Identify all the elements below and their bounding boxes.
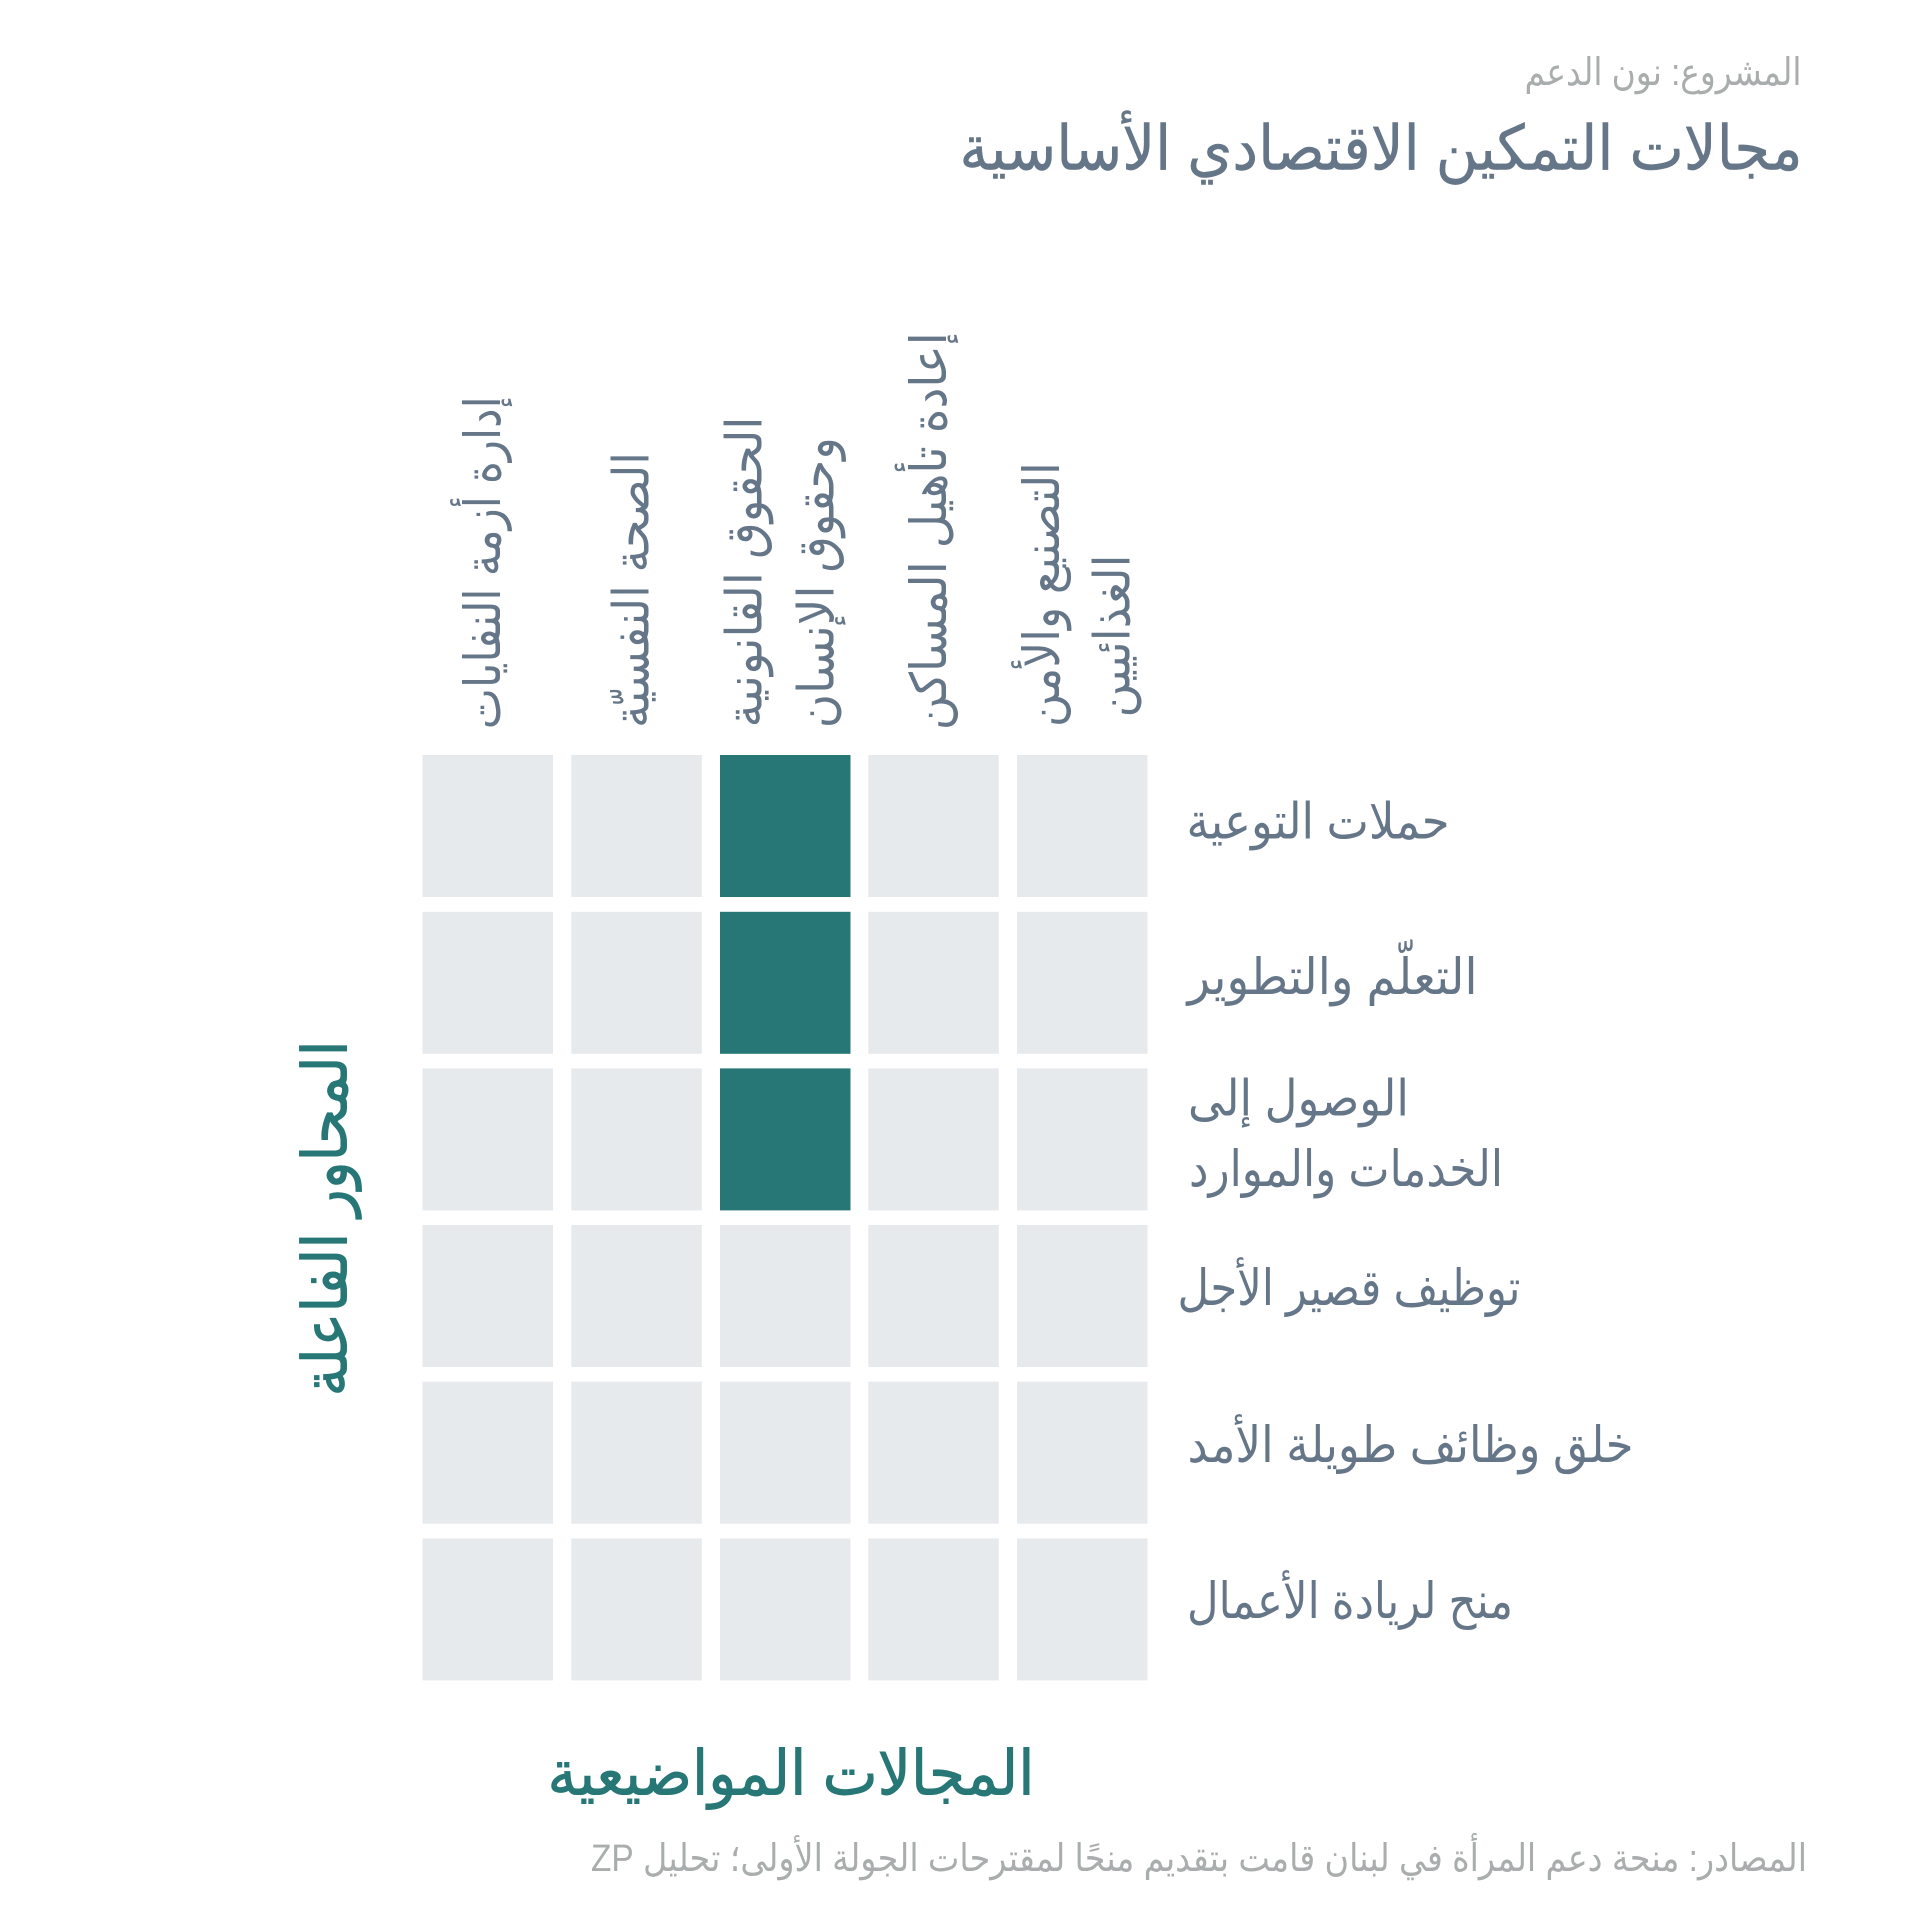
row label: learning and development: التعلّم والتطوير — [1185, 939, 1478, 1007]
column header: manufacturing and food security: الغذائيين — [1085, 554, 1142, 718]
row labels — [1178, 794, 1634, 1631]
row: access to services and resources — [422, 1068, 1148, 1210]
row label: awareness campaigns: حملات التوعية — [1186, 794, 1450, 850]
column headers — [450, 332, 1142, 730]
column header: manufacturing and food security: التصنيع والأمن — [1011, 462, 1072, 727]
row: learning and development — [422, 912, 1148, 1054]
column header: legal and human rights: وحقوق الإنسان — [789, 437, 847, 728]
column header: waste crisis management: إدارة أزمة النفايات — [450, 396, 513, 729]
row: short-term employment — [422, 1225, 1148, 1367]
row label: access to services and resources: الوصول إلى — [1188, 1070, 1409, 1128]
column header: mental health: الصحة النفسيّة — [604, 452, 660, 728]
row: awareness campaigns — [422, 755, 1148, 897]
vertical axis title: المحاور الفاعلة — [292, 1040, 362, 1396]
row label: short-term employment: توظيف قصير الأجل — [1178, 1257, 1520, 1317]
row label: access to services and resources — [1188, 1070, 1503, 1199]
column header: legal and human rights: الحقوق القانونية — [717, 416, 774, 728]
column header: manufacturing and food security — [1011, 462, 1142, 727]
column header: housing rehabilitation: إعادة تأهيل المساكن — [894, 332, 959, 730]
row label: long-term job creation: خلق وظائف طويلة الأمد — [1188, 1414, 1634, 1475]
title: مجالات التمكين الاقتصادي الأساسية — [960, 110, 1802, 184]
horizontal axis title: المجالات المواضيعية — [548, 1740, 1034, 1810]
row label: access to services and resources: الخدمات والموارد — [1189, 1141, 1503, 1199]
row: long-term job creation — [422, 1382, 1148, 1524]
project label: المشروع: نون الدعم — [1524, 52, 1802, 95]
column header: legal and human rights — [717, 416, 847, 728]
row label: entrepreneurship grants: منح لريادة الأعمال — [1187, 1570, 1513, 1631]
row: entrepreneurship grants — [422, 1538, 1148, 1680]
heatmap grid — [422, 755, 1148, 1680]
